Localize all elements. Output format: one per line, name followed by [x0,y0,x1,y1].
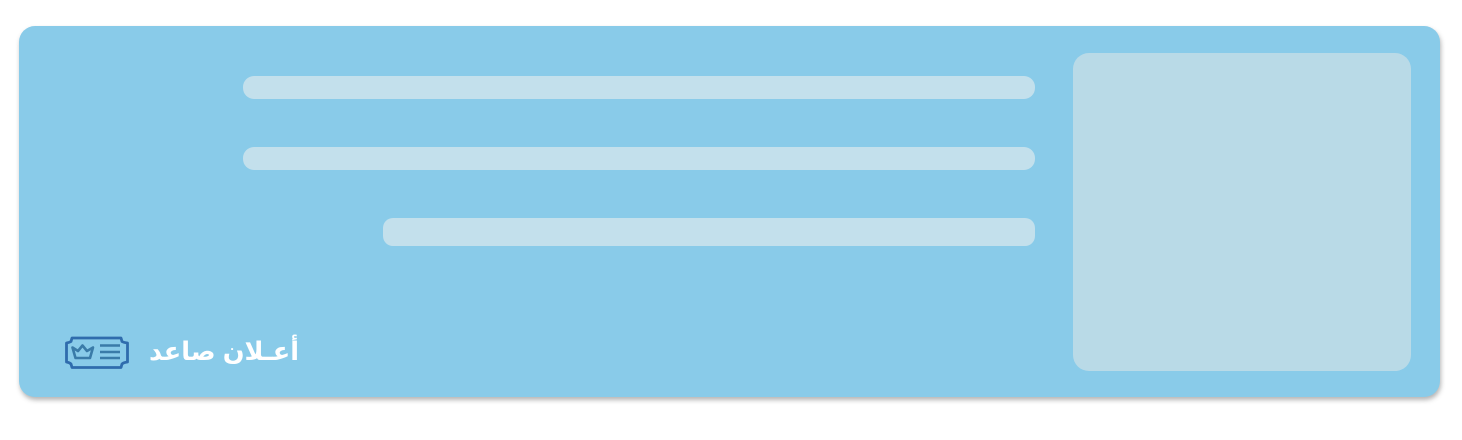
image placeholder [1073,53,1411,371]
text placeholder line 1 [242,76,1035,99]
text placeholder line 3 [382,218,1035,246]
list lines [100,346,120,358]
crown [72,346,93,358]
icon: ticket with crown and lines [65,336,129,369]
sponsored label text: أعـلان صاعد [149,338,299,366]
text placeholder line 2 [242,147,1035,170]
ticket outline [66,338,128,368]
